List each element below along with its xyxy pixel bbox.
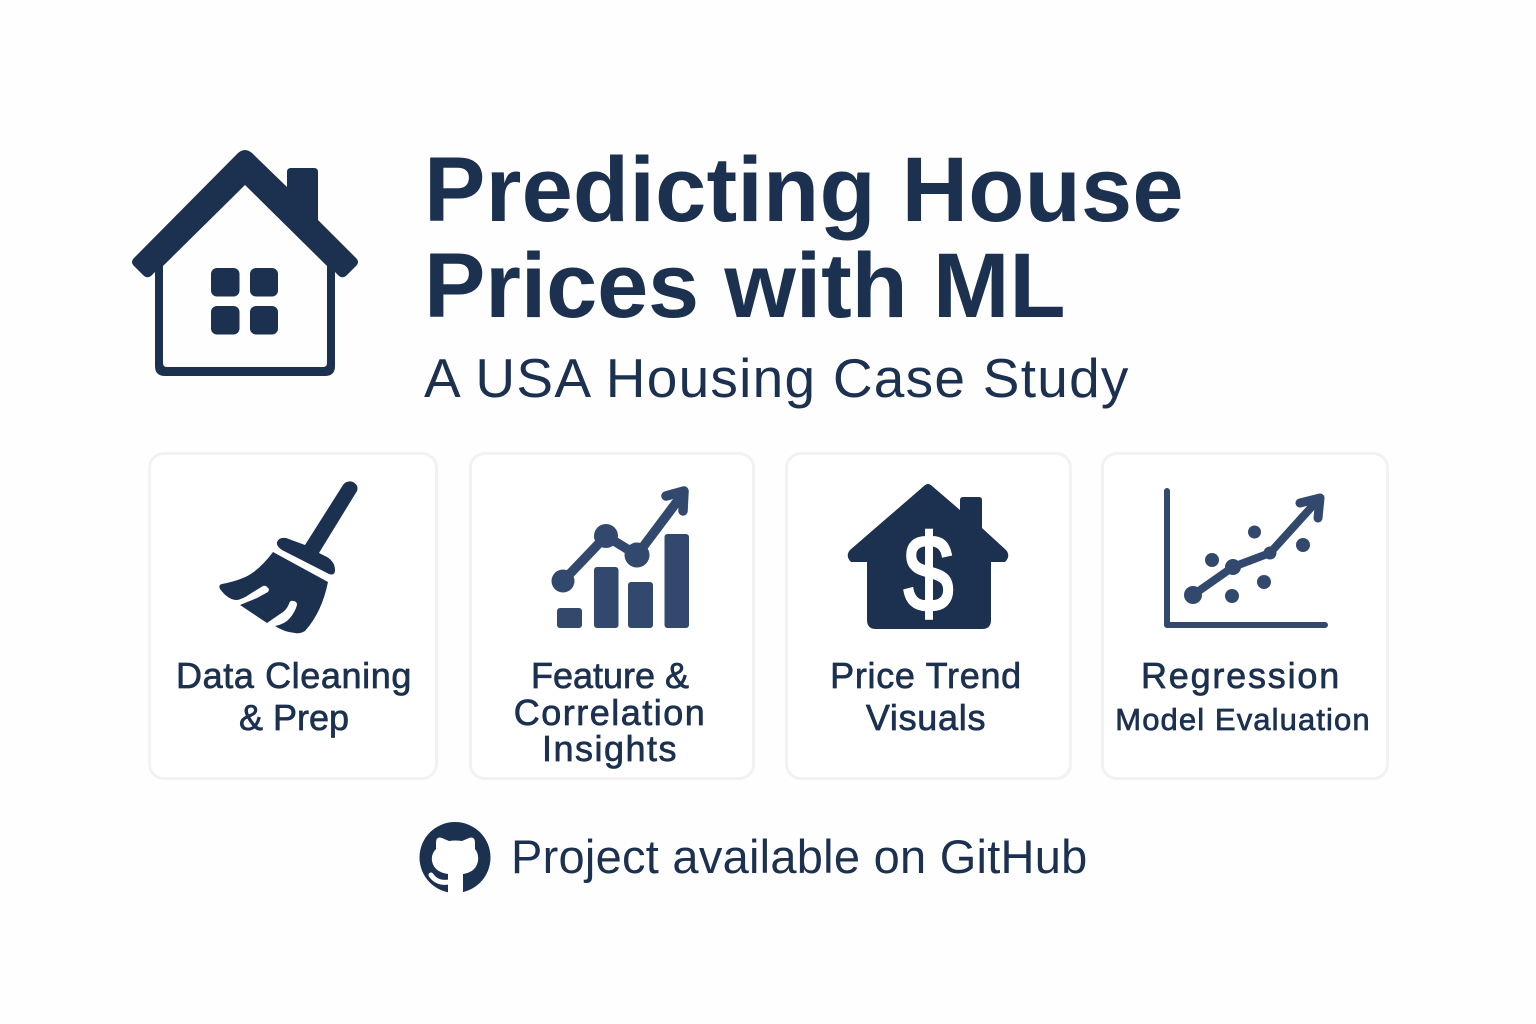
label: price trend	[830, 655, 1022, 738]
label: price trend: Visuals	[866, 697, 986, 738]
label: feature correlation: Correlation	[514, 692, 706, 732]
panel: regression	[1101, 452, 1389, 780]
label: data cleaning: Data Cleaning	[176, 655, 412, 696]
label: regression: Regression	[1141, 655, 1341, 696]
label: model evaluation: Model Evaluation	[1115, 702, 1371, 737]
title: Predicting House	[424, 139, 1184, 241]
subtitle: A USA Housing Case Study	[424, 347, 1130, 409]
label: price trend: Price Trend	[830, 655, 1022, 696]
icon: github	[420, 822, 490, 892]
label: feature correlation: Feature &	[531, 655, 689, 696]
icon: broom	[219, 481, 358, 634]
title: Prices with ML	[424, 235, 1065, 337]
icon: house logo	[132, 150, 358, 376]
label: feature correlation: Insights	[542, 728, 678, 769]
panel: data cleaning	[148, 452, 438, 780]
icon: house with dollar: $	[904, 514, 953, 635]
label: feature correlation	[514, 655, 706, 769]
icon: house with dollar	[848, 484, 1008, 635]
title	[424, 139, 1184, 337]
icon: bar and line chart	[552, 486, 689, 628]
footer text: Project available on GitHub	[511, 830, 1088, 883]
label: data cleaning	[176, 655, 412, 738]
label: data cleaning: & Prep	[239, 697, 349, 738]
panel: price trend	[785, 452, 1072, 780]
icon: scatter regression	[1164, 488, 1328, 628]
panel: feature correlation	[469, 452, 755, 780]
